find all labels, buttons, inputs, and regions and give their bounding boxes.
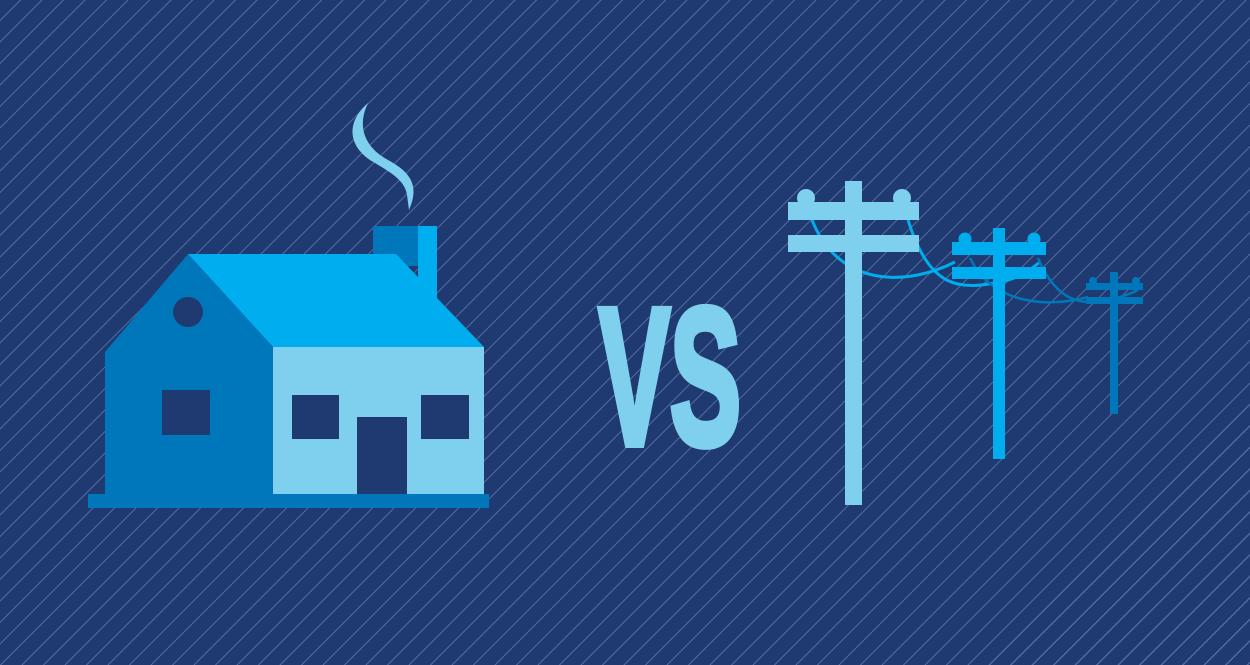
door (357, 417, 407, 496)
icon: small utility pole (1086, 272, 1143, 414)
icon: medium utility pole (952, 228, 1046, 459)
icon: house (88, 103, 489, 508)
front windows (292, 395, 469, 439)
smoke (352, 103, 413, 210)
base slab (88, 494, 489, 508)
front wall (273, 347, 484, 496)
icon: large utility pole (788, 181, 919, 505)
gable wall (105, 254, 273, 496)
left window (162, 390, 210, 435)
chimney (373, 226, 437, 298)
VS text: VS (599, 268, 741, 486)
roof (188, 254, 484, 347)
wires (812, 220, 1138, 302)
round window (173, 297, 203, 327)
